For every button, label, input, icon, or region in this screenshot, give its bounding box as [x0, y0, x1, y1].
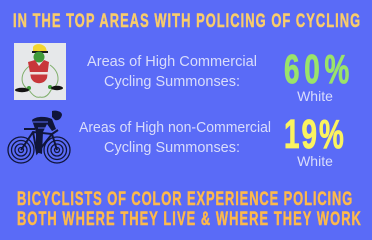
- icon: road cyclist silhouette: [8, 111, 70, 163]
- icon: cyclist in red vest drawing: [14, 43, 66, 100]
- title: IN THE TOP AREAS WITH POLICING OF CYCLING: [13, 9, 360, 32]
- label: white under 60 percent: White: [297, 88, 333, 104]
- text: high non-commercial label: Cycling Summonses:: [104, 140, 240, 156]
- text: high non-commercial label: [79, 120, 271, 156]
- conclusion heading: BOTH WHERE THEY LIVE & WHERE THEY WORK: [17, 207, 361, 230]
- text: high non-commercial label: Areas of High non-Commercial: [79, 120, 271, 136]
- stat: 19 percent: 19%: [284, 112, 344, 157]
- conclusion heading: BICYCLISTS OF COLOR EXPERIENCE POLICING: [17, 187, 352, 210]
- text: high commercial label: Cycling Summonses:: [104, 74, 240, 90]
- text: high commercial label: [87, 54, 257, 90]
- text: high commercial label: Areas of High Commercial: [87, 54, 257, 70]
- stat: 60 percent: 60%: [284, 47, 349, 92]
- label: white under 19 percent: White: [297, 153, 333, 169]
- conclusion heading: [17, 187, 361, 230]
